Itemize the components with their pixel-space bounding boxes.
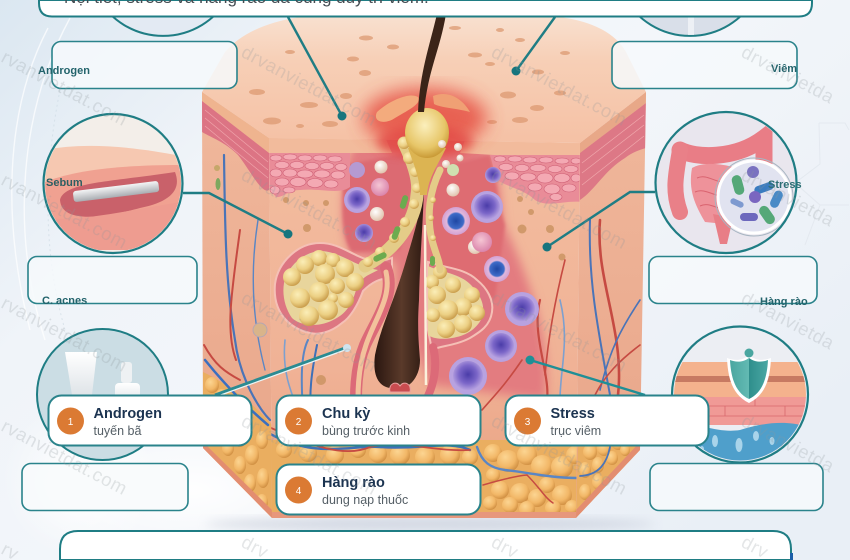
card 1: Androgen: tuyến bã: [94, 424, 142, 438]
label box: C. acnes: C. acnes: [42, 295, 87, 307]
leader: gut: [542, 192, 655, 252]
watermark: rvanvietdat.com: [0, 292, 131, 376]
circle icon: sebum implant: [44, 114, 182, 253]
watermark: drvanvietdat.com: [238, 287, 381, 376]
card 4: Hàng rào: Hàng rào: [322, 475, 385, 491]
tan layer under surface: [268, 137, 392, 153]
leader: sebum: [183, 193, 292, 238]
hair root: [374, 190, 424, 388]
card 2: Chu kỳ: 2: [296, 417, 302, 428]
card 3: Stress: 3: [525, 417, 531, 428]
watermark: drvanvietdat.com: [238, 164, 381, 253]
circle: top left (cropped): [99, 0, 227, 36]
immune cells: [344, 140, 539, 395]
bottom banner: [60, 531, 793, 560]
watermark: drvanvietdat.com: [488, 41, 631, 130]
circle: top right (cropped): [626, 0, 754, 36]
watermark: rvanvietdat.com: [0, 415, 131, 499]
follicle sheath: [356, 268, 435, 400]
follicle golden wall: [363, 137, 440, 270]
red core under the pore: [377, 126, 473, 158]
leader: top left: [288, 17, 346, 120]
card 2: Chu kỳ: Chu kỳ: [322, 406, 370, 422]
empty box: lower left: [22, 464, 188, 510]
card 1: Androgen: [48, 396, 252, 446]
watermark: drvanvietdat.com: [488, 287, 631, 376]
leader: barrier: [526, 356, 645, 395]
card 4: Hàng rào: [276, 464, 480, 514]
watermark: rvanvietdat.com: [0, 46, 131, 130]
card 2: Chu kỳ: bùng trước kinh: [322, 424, 410, 438]
right side face: [574, 90, 648, 520]
watermark: drvanvietda: [738, 164, 838, 231]
card 3: Stress: trục viêm: [550, 424, 601, 438]
label box: Androgen: [38, 42, 237, 88]
label: Stress: Stress: [768, 179, 802, 191]
watermark: drvanvietda: [738, 410, 838, 477]
leader: cream: [215, 344, 351, 396]
illustration: skin cross-section block: [200, 14, 648, 523]
hair shaft: [418, 14, 446, 112]
circle icon: barrier shield: [670, 326, 810, 470]
subcutaneous fat: [272, 440, 577, 512]
inflamed glow around pore: [363, 88, 487, 148]
card 1: Androgen: Androgen: [94, 406, 162, 422]
top banner: [39, 0, 812, 16]
label box: Hàng rào: Hàng rào: [760, 296, 808, 308]
label box: Hàng rào: [649, 256, 817, 308]
watermark: drvanvietdat.com: [238, 41, 381, 130]
watermark: drvanvietda: [738, 41, 838, 108]
inflamed zone: [343, 115, 547, 400]
label: Sebum: Sebum: [46, 177, 83, 189]
watermark: drvanvietdat.com: [238, 410, 381, 499]
front face: [264, 115, 585, 523]
hair bulb and pore lips: [376, 94, 470, 195]
label box: C. acnes: [28, 256, 197, 307]
card 3: Stress: Stress: [550, 406, 595, 422]
dermis spots: [283, 196, 566, 385]
watermark: drvanvietdat.com: [488, 164, 631, 253]
lower dermis vessels: [284, 260, 565, 420]
sebaceous gland right: [428, 262, 492, 350]
label box: Viêm: Viêm: [771, 63, 797, 75]
card 4: Hàng rào: dung nạp thuốc: [322, 493, 408, 507]
epidermis band: [268, 153, 582, 204]
shield: [727, 348, 771, 403]
leader: top right: [512, 17, 555, 76]
sebaceous gland left: [275, 243, 392, 334]
watermark: drvanvietdat.com: [488, 410, 631, 499]
left side face: [200, 90, 275, 520]
watermark: drvanvietda: [738, 287, 838, 354]
top skin surface: [202, 17, 646, 143]
card 4: Hàng rào: 4: [296, 486, 302, 497]
card 1: Androgen: 1: [68, 417, 74, 428]
label box: Androgen: Androgen: [38, 65, 90, 77]
card 3: Stress: [506, 396, 708, 446]
empty box: lower right: [650, 464, 823, 510]
circle icon: gut microbiome: [656, 112, 796, 253]
card 2: Chu kỳ: [276, 396, 480, 446]
circle icon: skin care products: [37, 329, 168, 460]
label box: Viêm: [612, 42, 797, 88]
watermark: rvanvietdat.com: [0, 169, 131, 253]
